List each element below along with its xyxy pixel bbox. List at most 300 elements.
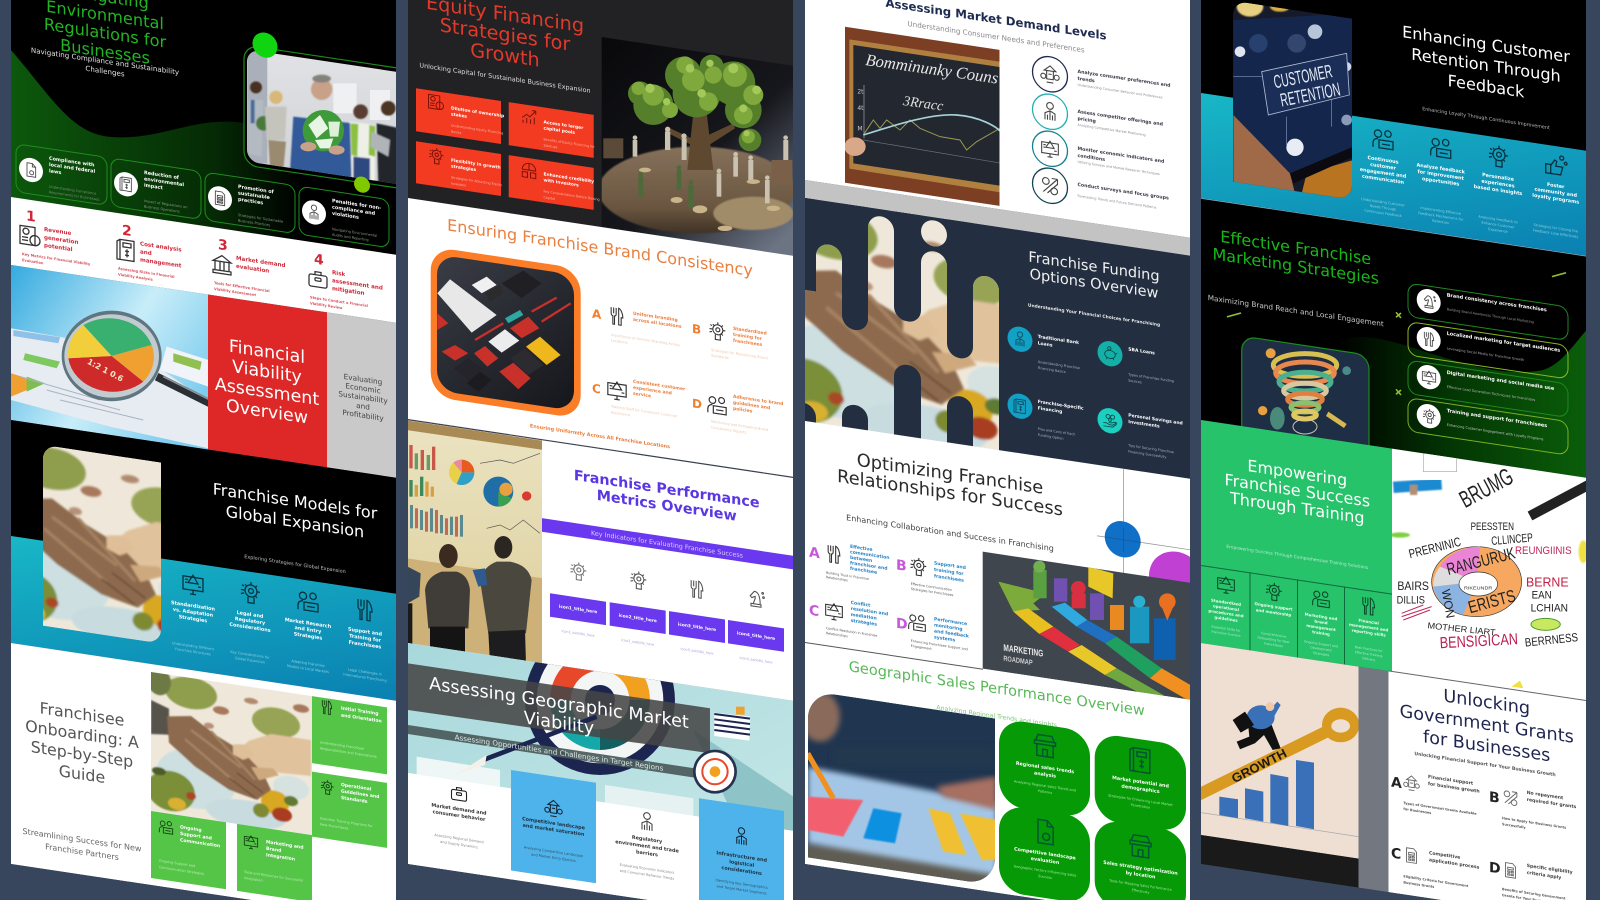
card: initial training: Responsibilities and Expectations xyxy=(320,746,377,759)
card: regulatory environment: environment and trade xyxy=(615,839,679,855)
item: revenue: potential xyxy=(44,243,73,253)
item: market research: Market Research xyxy=(285,617,332,630)
item A: A xyxy=(1391,775,1402,792)
item C: Conflict xyxy=(851,600,871,609)
photo: chalkboard chart: Bomminunky Couns xyxy=(864,50,999,88)
item: market demand: Viability Assessment xyxy=(214,287,256,297)
title: Effective Franchise xyxy=(1220,227,1371,269)
panel: environmental regulations slide xyxy=(11,0,414,258)
metric 2 xyxy=(610,567,666,649)
item C: resolution and xyxy=(851,606,888,617)
item C: customer experience: service xyxy=(633,391,651,399)
card: access: Benefits of Equity Financing for xyxy=(544,137,595,149)
item A: Financial support xyxy=(1428,774,1474,787)
panel: government grants slide xyxy=(1200,642,1586,900)
photo: whiteboard mind-map sketch: ERISTS xyxy=(1466,585,1518,617)
card: penalties: violations xyxy=(332,211,359,221)
item A: Types of Government Grants Available xyxy=(1403,801,1477,816)
item A: Relationships xyxy=(826,575,848,582)
item: cost analysis: Cost analysis xyxy=(140,241,182,254)
row: training and support: Enhancing Customer Engagement with Loyalty Programs xyxy=(1447,423,1544,441)
item C: customer experience: Experience xyxy=(611,410,630,417)
column 3 of slides xyxy=(708,0,1205,900)
item: market research: and Entry xyxy=(295,625,322,635)
title: Enhancing Customer xyxy=(1402,22,1570,66)
title: Franchisee xyxy=(40,698,124,730)
card: dilution: Basics xyxy=(451,129,462,135)
card: compliance: local and federal xyxy=(49,162,95,175)
item B: How to Apply for Business Grants xyxy=(1502,816,1566,830)
item: market demand xyxy=(213,236,285,302)
photo: magnifying glass over charts xyxy=(11,265,208,450)
photo: whiteboard mind-map sketch: RANGURUK xyxy=(1445,543,1517,579)
photo: whiteboard mind-map sketch: PRERNINIC xyxy=(1407,535,1462,561)
photo: whiteboard mind-map sketch: PEESSTEN xyxy=(1471,521,1514,533)
item: revenue: 1 xyxy=(26,208,36,226)
card: regional trends: analysis xyxy=(1034,770,1056,780)
item B: franchisees xyxy=(934,573,964,584)
item: standardization: vs. Adaptation xyxy=(173,607,214,619)
card: credibility: Capital xyxy=(544,195,555,201)
item: analyze feedback: for improvement xyxy=(1418,169,1464,182)
item: cost analysis: management xyxy=(140,257,182,270)
item B: Strategies for Franchisees xyxy=(911,587,954,597)
item: personal savings: Personal Savings and xyxy=(1128,413,1183,427)
item C: Conflict Resolution in Franchise xyxy=(826,626,877,638)
item D: brand guidelines: Consistency Reports xyxy=(711,425,747,435)
icon: briefcase xyxy=(309,271,327,288)
item: community: Feedback Loop Effectively xyxy=(1533,228,1578,239)
card: access: Startups xyxy=(544,143,558,149)
card: competitive landscape: Competitive landscape xyxy=(522,816,586,832)
photo: whiteboard mind-map sketch xyxy=(1390,424,1588,718)
item D: D xyxy=(1489,860,1501,878)
metric 2: icon2_subtitle_here xyxy=(621,638,654,647)
item: cost analysis: 2 xyxy=(122,223,132,240)
item B: standardized training: Standardized xyxy=(733,326,767,337)
card: compliance: Requirements for Businesses xyxy=(49,190,100,202)
item D xyxy=(896,611,970,657)
item D: and feedback xyxy=(934,628,970,640)
item: consumer preferences: trends xyxy=(1078,76,1095,84)
item: consumer preferences xyxy=(1032,54,1171,110)
item D: brand guidelines: D xyxy=(692,396,702,412)
card: access xyxy=(509,102,595,158)
title: Regulations for xyxy=(44,15,166,52)
row: digital marketing xyxy=(1408,360,1568,418)
card: operational guidelines: Essential Training Programs for xyxy=(320,816,373,828)
subtitle: Empowering Success Through Comprehensive Training Solutions xyxy=(1226,544,1369,571)
item: marketing management: training xyxy=(1312,629,1330,637)
title: Assessing Geographic Market xyxy=(429,674,689,733)
photo: whiteboard mind-map sketch: WON xyxy=(1439,588,1458,619)
subtitle block: grey: Economic xyxy=(345,381,381,395)
photo: chalkboard chart: 3Rracc xyxy=(901,94,945,115)
subtitle: Understanding Your Financial Choices for Franchising xyxy=(1028,302,1160,328)
title: Franchise Performance xyxy=(574,468,760,512)
item: marketing management: Strategies xyxy=(1313,651,1329,657)
item: legal: Global Expansion xyxy=(235,656,265,665)
item C xyxy=(809,594,888,644)
icon: battery xyxy=(215,191,225,206)
panel: geographic sales slide xyxy=(800,641,1190,900)
card: competitive landscape xyxy=(511,770,596,883)
item: personal savings: Tips for Securing Franchise xyxy=(1127,443,1174,454)
item: cost analysis: Assessing Risks in Financial xyxy=(118,267,175,279)
title: Step-by-Step xyxy=(31,737,133,771)
photo: team holding recycling globe xyxy=(243,46,396,188)
icon: ledger xyxy=(117,239,134,261)
photo: marketing funnel xyxy=(1242,332,1369,465)
row: localized marketing: Leveraging Social Media for Franchise Growth xyxy=(1447,346,1524,362)
item C: Relationships xyxy=(826,631,848,638)
title: Marketing Strategies xyxy=(1212,244,1379,288)
card: initial training xyxy=(312,696,387,774)
item C: Competitive xyxy=(1429,850,1460,861)
card: infrastructure: Identifying Key Demographics xyxy=(716,878,768,890)
card: regulatory environment xyxy=(596,801,699,900)
subtitle block: grey xyxy=(327,312,396,478)
item B: No repayment xyxy=(1527,790,1564,801)
item: continuous engagement xyxy=(1360,127,1407,219)
photo: whiteboard mind-map sketch: CLLINCEP xyxy=(1491,530,1533,548)
title: Geographic Sales Performance Overview xyxy=(849,658,1145,720)
card: reduction: impact xyxy=(144,183,163,191)
item: consumer preferences: Analyze consumer preferences and xyxy=(1078,69,1171,89)
card: reduction: Impact of Regulations on xyxy=(144,199,187,209)
icon: bank xyxy=(213,254,231,275)
item: risk: Viability Review xyxy=(310,301,343,310)
subtitle: Understanding Consumer Needs and Preferences xyxy=(907,19,1085,55)
item: standardization: Strategies xyxy=(179,614,207,624)
item: legal: Considerations xyxy=(229,622,271,634)
item A: uniform branding: across all locations xyxy=(633,317,682,330)
card: access: capital pools xyxy=(544,125,575,136)
item: bank loans: Understanding Franchise xyxy=(1038,360,1080,370)
item D: Engagement xyxy=(911,644,932,651)
card: market potential: Strategies for Enhancing Local Market xyxy=(1108,794,1173,807)
column 1 of slides xyxy=(0,0,414,900)
card: initial training: and Orientation xyxy=(341,713,382,725)
footer note: Ensuring Uniformity Across All Franchise Locations xyxy=(530,423,670,450)
row: brand consistency xyxy=(1408,283,1568,341)
metric 1: icon1_title_here xyxy=(559,604,597,615)
item: consumer preferences: Understanding Consumer Behavior and Preferences xyxy=(1078,83,1163,100)
item: financial management: Financial xyxy=(1359,618,1379,626)
decorative lime dot xyxy=(354,176,370,193)
card: market potential: demographics xyxy=(1121,783,1160,795)
photo: whiteboard mind-map sketch: BERNE xyxy=(1526,576,1569,590)
card: promotion: Strategies for Sustainable xyxy=(238,213,283,224)
card: competitive landscape: and Market Entry Barriers xyxy=(531,852,576,863)
card: credibility: with investors xyxy=(544,177,579,189)
card: initial training: Initial Training xyxy=(341,706,378,717)
item: bank loans: Loans xyxy=(1038,340,1053,349)
item B: standardized training: franchisees xyxy=(733,338,763,348)
decorative dash xyxy=(1227,311,1241,319)
item: support: Legal Challenges in xyxy=(348,668,382,677)
photo: magnifying glass over charts: 1:2 1 0.6 xyxy=(86,357,125,384)
subtitle banner xyxy=(542,518,793,569)
item: market research: Models to Local Markets xyxy=(287,664,329,674)
item A: for business growth xyxy=(1428,781,1480,795)
item: analyze feedback: Implementing Effective xyxy=(1420,206,1461,216)
card: ongoing support: Ongoing Support and xyxy=(159,859,195,868)
card: regional trends xyxy=(999,718,1090,819)
photo: whiteboard mind-map sketch: REUNGIINIS xyxy=(1515,545,1572,557)
item: risk: Steps to Conduct a Financial xyxy=(310,295,368,308)
item B: required for grants xyxy=(1527,797,1577,810)
item: continuous engagement: customer xyxy=(1370,162,1396,172)
card: regulatory environment: Regulatory xyxy=(632,835,663,845)
panel: geographic market viability slide xyxy=(407,566,797,900)
item A xyxy=(809,538,890,589)
title: Franchise Funding xyxy=(1028,249,1160,285)
item: franchise-specific financing: Pros and Cons of Each xyxy=(1038,427,1075,437)
item C: customer experience: C xyxy=(592,381,601,397)
item: competitor pricing: Analyzing Competitive Market Positioning xyxy=(1078,123,1146,137)
photo: marketing roadmap: ROADMAP xyxy=(1003,654,1033,667)
item: marketing management xyxy=(1304,589,1338,659)
photo: tree on coin island xyxy=(598,0,797,293)
card: infrastructure: considerations xyxy=(721,865,762,877)
panel: franchisee onboarding slide xyxy=(11,643,396,900)
subtitle: Enhancing Collaboration and Success in Franchising xyxy=(846,513,1054,553)
item: ongoing support xyxy=(1255,580,1293,650)
item A: franchisor and xyxy=(850,560,888,572)
item: legal xyxy=(229,579,271,665)
card: flexibility: Investors xyxy=(451,181,466,188)
item: analyze feedback: Retention xyxy=(1432,219,1449,225)
photo: team reviewing charts xyxy=(407,396,545,684)
title: Through Training xyxy=(1229,488,1365,528)
item: franchise-specific financing: Financing xyxy=(1038,405,1062,415)
card: promotion: Promotion of xyxy=(238,184,275,196)
icon: cash register xyxy=(20,225,40,246)
item: standardization: Franchise Structures xyxy=(175,647,211,656)
card: competitive landscape: Geographic Factors Influencing Sales xyxy=(1014,864,1077,878)
card: regulatory environment: Evaluating Economic Indicators xyxy=(620,863,675,875)
row: brand consistency: Brand consistency across franchises xyxy=(1447,292,1547,313)
card: dilution: Dilution of ownership xyxy=(451,105,504,119)
title block: red: Assessment xyxy=(215,375,319,410)
card: competitive landscape: Competitive landscape xyxy=(1014,846,1077,862)
subtitle: Challenges xyxy=(85,64,125,79)
card: ongoing support: Communication Strategies xyxy=(159,865,204,876)
item D: D xyxy=(896,616,908,633)
card: market demand: consumer behavior xyxy=(433,809,486,823)
row: training and support xyxy=(1408,398,1568,455)
item D: brand guidelines: guidelines and xyxy=(733,400,770,411)
card: market demand xyxy=(408,773,511,879)
item D: systems xyxy=(934,634,956,644)
card: dilution xyxy=(416,88,504,144)
item D: Specific eligibility xyxy=(1527,863,1573,876)
item: economic indicators: Monitor economic indicators and xyxy=(1078,146,1164,165)
illustration: growth key with bars xyxy=(1200,678,1359,861)
photo: marketing roadmap xyxy=(980,515,1193,735)
item B: standardized training xyxy=(692,318,768,366)
icon: document seal xyxy=(27,163,36,177)
item C: customer experience xyxy=(592,373,686,426)
panel: financial viability slide xyxy=(11,197,396,478)
item: analyze feedback: Feedback Mechanisms for xyxy=(1418,211,1464,222)
card: reduction: Business Operations xyxy=(144,204,180,214)
item: economic indicators xyxy=(1032,129,1164,183)
card: marketing integration: Brand xyxy=(266,846,281,854)
card: compliance: Understanding Compliance xyxy=(49,185,96,196)
item D: brand guidelines: policies xyxy=(733,406,753,415)
metric 2: icon2_title_here xyxy=(619,613,657,624)
row: training and support: Training and support for franchisees xyxy=(1447,408,1547,429)
title: Global Expansion xyxy=(226,502,364,541)
item D: Performance xyxy=(934,616,967,627)
item B xyxy=(896,554,966,599)
card: sales strategy: Tools for Mapping Sales Performance xyxy=(1108,879,1172,892)
card: compliance xyxy=(16,144,107,205)
metric 4 xyxy=(728,587,784,666)
column 4 of slides xyxy=(1200,0,1588,900)
item: revenue: generation xyxy=(44,235,79,246)
item: personal savings: Financing Successfully xyxy=(1128,450,1166,459)
card: operational guidelines: Operational xyxy=(341,782,372,793)
card: dilution: stakes xyxy=(451,111,467,120)
panel: franchise marketing slide xyxy=(1201,198,1588,538)
photo: handshake over map xyxy=(43,446,161,642)
item: revenue: Revenue xyxy=(44,227,71,237)
item C: mediation xyxy=(851,612,877,622)
card: marketing integration: Integration xyxy=(244,876,263,883)
title: Relationships for Success xyxy=(837,466,1063,521)
title: Businesses xyxy=(60,35,150,68)
panel: customer retention slide xyxy=(1201,0,1586,256)
card: credibility: Key Considerations Before Raising xyxy=(544,189,600,202)
card: competitive landscape: Success xyxy=(1038,874,1052,880)
item D: Enhancing Franchisee Support and xyxy=(911,639,968,651)
subtitle block: grey: and xyxy=(356,401,370,412)
item: market research xyxy=(285,589,332,675)
item B: standardized training: Strategies for Maintaining Brand xyxy=(711,348,768,360)
card: penalties xyxy=(299,186,389,248)
item C: Business Grants xyxy=(1403,880,1434,889)
item: SBA loans: Sources xyxy=(1128,379,1142,385)
card: operational guidelines: Standards xyxy=(341,795,368,805)
item: risk: Risk xyxy=(332,270,346,278)
photo: marketing roadmap: MARKETING xyxy=(1003,643,1043,659)
decorative blue circle xyxy=(1105,519,1141,560)
item: revenue: Evaluation xyxy=(22,258,44,265)
card: market demand: Market demand and xyxy=(431,803,487,817)
row: digital marketing: Digital marketing and social media use xyxy=(1447,370,1555,392)
decorative cross xyxy=(1396,312,1401,318)
metric 1 xyxy=(550,558,606,640)
item: competitor pricing: pricing xyxy=(1078,116,1096,125)
photo: whiteboard mind-map sketch: RIKEUNDR xyxy=(1464,585,1493,591)
item: personal savings xyxy=(1098,406,1183,462)
card: marketing integration xyxy=(237,824,312,900)
card: market demand: Assessing Regional Demand xyxy=(434,833,484,844)
item: standardization xyxy=(171,572,215,657)
item: community xyxy=(1532,152,1579,239)
card: market potential: Penetration xyxy=(1131,803,1150,810)
column 2 of slides xyxy=(407,0,797,900)
card: ongoing support: Support and xyxy=(180,831,212,842)
metric 3: icon3_subtitle_here xyxy=(681,647,713,656)
card: competitive landscape: and market saturation xyxy=(523,823,585,838)
item B: Successfully xyxy=(1502,822,1526,830)
item: bank loans: Traditional Bank xyxy=(1038,334,1080,346)
item D: brand guidelines: Adherence to brand xyxy=(733,394,783,407)
subtitle: Unlocking Capital for Sustainable Business Expansion xyxy=(419,61,591,95)
card: promotion: Business Practices xyxy=(238,219,270,227)
item C: customer experience: Consistent customer xyxy=(633,379,686,393)
title: Options Overview xyxy=(1030,266,1158,302)
item: franchise-specific financing: Funding Option xyxy=(1038,433,1064,441)
title: Strategies for xyxy=(440,13,570,56)
card: flexibility: Strategies for Attracting Equity xyxy=(451,175,502,187)
item D: monitoring xyxy=(934,622,962,633)
panel: brand consistency slide xyxy=(408,198,793,478)
photo: handshake xyxy=(151,672,312,835)
item B: Effective Communication xyxy=(911,582,952,592)
metric 3: icon3_title_here xyxy=(678,622,716,633)
item: ongoing support: and mentorship xyxy=(1256,607,1291,618)
subtitle: Exploring Strategies for Global Expansion xyxy=(244,554,346,575)
card: flexibility xyxy=(416,141,502,196)
photo: whiteboard mind-map sketch: DILLIS xyxy=(1397,594,1425,606)
item: economic indicators: Utilizing Surveys and Market Research Techniques xyxy=(1078,160,1160,176)
card: access: Access to larger xyxy=(544,119,584,131)
item A: uniform branding: Importance of Uniform Branding Across xyxy=(611,333,680,347)
item B xyxy=(1489,784,1577,837)
item: SBA loans: SBA Loans xyxy=(1128,347,1155,357)
item: bank loans: Financing Basics xyxy=(1038,366,1066,374)
item B: standardized training: training for xyxy=(733,332,763,342)
card: sales strategy: Effectively xyxy=(1132,888,1149,895)
card: marketing integration: Integration xyxy=(266,852,295,863)
item: continuous engagement: Needs Through xyxy=(1370,204,1396,212)
item A: A xyxy=(809,545,820,562)
card: penalties: Penalties for non- xyxy=(332,198,381,212)
item D xyxy=(1489,857,1573,900)
item: revenue xyxy=(19,210,90,266)
subtitle: Streamlining Success for New xyxy=(23,827,142,854)
item: standardized procedures: Essential Skills for xyxy=(1212,625,1241,633)
item C: customer experience: Training Staff for Consistent Customer xyxy=(610,404,678,418)
item C: application process xyxy=(1429,857,1480,871)
row: localized marketing xyxy=(1408,322,1568,379)
metric 1: icon1_subtitle_here xyxy=(562,629,594,638)
item D: criteria apply xyxy=(1527,870,1561,881)
item: personalize: Enhance Customer xyxy=(1481,221,1515,230)
item A: between xyxy=(850,555,872,564)
metric 3 xyxy=(669,577,725,658)
metric 4: icon4_title_here xyxy=(737,630,775,642)
item: community: Strategies for Closing the xyxy=(1534,223,1578,234)
subtitle banner: Key Indicators for Evaluating Franchise Success xyxy=(591,529,744,560)
photo: customer retention tablet: CUSTOMER xyxy=(1272,60,1334,92)
card: market potential xyxy=(1095,732,1186,833)
title: Retention Through xyxy=(1411,45,1561,86)
card: reduction: Reduction of xyxy=(144,170,180,181)
item: community: community and xyxy=(1534,187,1577,199)
metric 4: icon4_subtitle_here xyxy=(740,656,772,665)
photo: whiteboard mind-map sketch: BAIRS xyxy=(1397,579,1429,593)
item: standardization: Standardization xyxy=(171,600,215,613)
title: Viability xyxy=(524,708,594,739)
item C: C xyxy=(1391,846,1401,863)
title block: red: Financial xyxy=(229,337,305,368)
